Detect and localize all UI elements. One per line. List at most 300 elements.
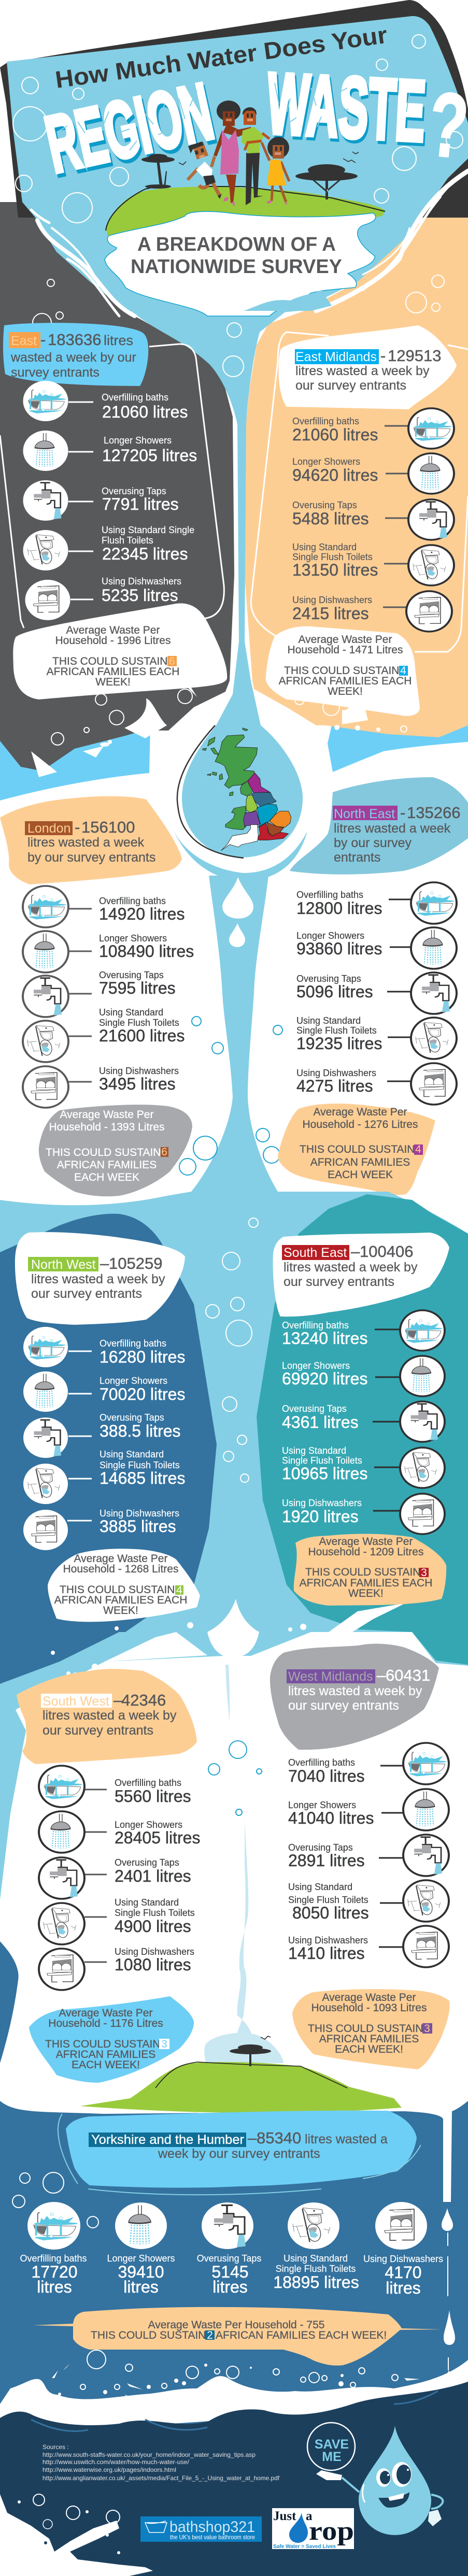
callout: South West total bbox=[17, 1669, 197, 1764]
callout: London average: Household - 1393 Litres bbox=[49, 1121, 164, 1133]
section: Yorkshire blue background bbox=[0, 2101, 468, 2425]
item: overusing taps: 5145 bbox=[211, 2263, 249, 2281]
cloud behind tree bbox=[204, 2033, 283, 2063]
item: longer showers: Longer Showers bbox=[107, 2253, 175, 2264]
callout: London average: Average Waste Per bbox=[60, 1109, 153, 1121]
item: single flush toilets: 13150 litres bbox=[292, 561, 378, 579]
item: overusing taps: Overusing Taps bbox=[197, 2253, 261, 2264]
item: dishwashers: Using Dishwashers bbox=[292, 595, 372, 605]
item: longer showers bbox=[288, 1789, 449, 1830]
subtitle: a breakdown of a nationwide survey: NATIONWIDE SURVEY bbox=[131, 256, 342, 278]
callout: London average bbox=[39, 1105, 192, 1196]
callout: Yorkshire total bbox=[66, 2111, 417, 2188]
callout: North East average: 4 bbox=[415, 1143, 421, 1155]
footer ripple lines bbox=[31, 2391, 438, 2431]
item: single flush toilets bbox=[296, 1015, 457, 1059]
item: longer showers: 69920 litres bbox=[282, 1369, 367, 1388]
callout: East Midlands average: 4 bbox=[400, 665, 406, 677]
item: single flush toilets: Flush Toilets bbox=[102, 535, 153, 546]
callout: East total: - bbox=[40, 331, 46, 349]
callout: West Midlands total: – bbox=[377, 1666, 386, 1684]
item: dishwashers: Using Dishwashers bbox=[282, 1498, 362, 1508]
item: overusing taps: Overusing Taps bbox=[282, 1404, 347, 1414]
region: Cumbria bbox=[240, 781, 253, 796]
item: overfilling baths: Overfilling baths bbox=[296, 890, 363, 900]
item: overusing taps: 388.5 litres bbox=[100, 1422, 181, 1440]
item: longer showers: Longer Showers bbox=[296, 931, 364, 941]
item: dishwashers: 5235 litres bbox=[102, 586, 178, 605]
callout: Yorkshire average: 2 bbox=[207, 2329, 213, 2341]
region: Yorkshire bbox=[251, 792, 276, 807]
item: overusing taps bbox=[282, 1401, 445, 1442]
item: longer showers bbox=[292, 453, 454, 494]
illustration: family bbox=[188, 101, 289, 207]
callout: North East average: EACH WEEK bbox=[328, 1169, 393, 1181]
item: single flush toilets: Using Standard bbox=[100, 1449, 164, 1459]
item: overfilling baths bbox=[23, 1327, 185, 1367]
item: overusing taps: 5096 litres bbox=[296, 982, 373, 1001]
item: overfilling baths: Overfilling baths bbox=[102, 392, 168, 403]
item: dishwashers: 1920 litres bbox=[282, 1507, 359, 1526]
subtitle: a breakdown of a nationwide survey: A BREAKDOWN OF A bbox=[137, 234, 336, 255]
item: dishwashers: Using Dishwashers bbox=[288, 1935, 368, 1945]
callout: North East total: entrants bbox=[334, 850, 380, 865]
item: longer showers: 127205 litres bbox=[102, 446, 197, 465]
item: single flush toilets: Single Flush Toilets bbox=[100, 1460, 180, 1470]
callout: West Midlands average: AFRICAN FAMILIES bbox=[319, 2033, 419, 2045]
callout: East average: Household - 1996 Litres bbox=[55, 635, 171, 647]
item: longer showers: 93860 litres bbox=[296, 939, 382, 958]
callout: Yorkshire total: Yorkshire and the Humber bbox=[91, 2133, 244, 2147]
item: overusing taps: Overusing Taps bbox=[102, 486, 166, 496]
callout: South East average: Household - 1209 Litres bbox=[308, 1546, 423, 1558]
item: longer showers: litres bbox=[123, 2278, 159, 2296]
item: overusing taps bbox=[23, 1412, 181, 1458]
item: single flush toilets: Single Flush Toilets bbox=[296, 1025, 377, 1036]
item: longer showers: 94620 litres bbox=[292, 466, 378, 484]
sources: http://www.south-staffs-water.co.uk/your_home/indoor_water_saving_tips.asp bbox=[42, 2451, 256, 2458]
splash: bottom left bbox=[0, 2494, 153, 2576]
item: single flush toilets: Using Standard bbox=[292, 542, 357, 552]
item: dishwashers bbox=[23, 1066, 179, 1108]
bubbles: blue outline bbox=[208, 1741, 262, 1815]
callout: North East total: - bbox=[400, 804, 405, 822]
item: dishwashers bbox=[288, 1926, 449, 1967]
item: longer showers bbox=[282, 1356, 445, 1396]
item: overfilling baths: Overfilling baths bbox=[20, 2253, 87, 2264]
water below the cloud bbox=[244, 290, 332, 311]
item: longer showers: Longer Showers bbox=[99, 933, 167, 943]
item: overusing taps: litres bbox=[212, 2278, 248, 2296]
region: East bbox=[270, 811, 291, 827]
logo: bathshop321: the UK's best value bathroom store bbox=[170, 2534, 255, 2541]
item: dishwashers bbox=[39, 1947, 194, 1990]
item: overfilling baths: litres bbox=[37, 2278, 72, 2296]
callout: North West total: – bbox=[100, 1254, 109, 1272]
callout: London total: by our survey entrants bbox=[27, 850, 155, 865]
title: REGION bbox=[38, 66, 222, 193]
callout: South East total: litres wasted a week by bbox=[283, 1260, 418, 1275]
region: North East bbox=[248, 773, 270, 793]
subtitle cloud bbox=[105, 211, 376, 316]
item: single flush toilets: Using Standard bbox=[282, 1446, 346, 1456]
item: overfilling baths: Overfilling baths bbox=[115, 1778, 181, 1788]
section: navy footer bbox=[0, 2382, 468, 2576]
splash: under East bbox=[31, 674, 197, 777]
callout: North West average: THIS COULD SUSTAIN bbox=[60, 1584, 175, 1596]
splash above lower white area bbox=[51, 1599, 417, 1680]
mascot: SAVE ME bubble: SAVE bbox=[315, 2437, 349, 2452]
item: single flush toilets: 4900 litres bbox=[115, 1917, 191, 1936]
callout: South West average: Average Waste Per bbox=[59, 2007, 152, 2019]
callout: East average: THIS COULD SUSTAIN bbox=[52, 655, 167, 667]
region: North West bbox=[246, 795, 258, 812]
callout: Yorkshire total: 85340 bbox=[257, 2129, 301, 2147]
callout: Yorkshire average: THIS COULD SUSTAIN bbox=[91, 2329, 206, 2341]
item: overfilling baths: Overfilling baths bbox=[100, 1338, 166, 1349]
foam: white wave bbox=[0, 2360, 468, 2435]
callout: South West total: 42346 bbox=[121, 1691, 166, 1709]
callout: South East total: our survey entrants bbox=[283, 1275, 394, 1289]
item: dishwashers: 3885 litres bbox=[100, 1517, 176, 1536]
callout: South West total: our survey entrants bbox=[42, 1723, 153, 1738]
item: overfilling baths bbox=[282, 1310, 445, 1351]
item: longer showers bbox=[23, 1371, 185, 1412]
callout: South West average: AFRICAN FAMILIES bbox=[56, 2049, 155, 2060]
item: dishwashers bbox=[296, 1063, 457, 1105]
callout: South East total: South East bbox=[283, 1246, 347, 1260]
callout: South East average: 3 bbox=[421, 1567, 427, 1579]
panel: South East bbox=[273, 1233, 449, 1606]
item: overfilling baths bbox=[23, 886, 185, 927]
item: single flush toilets: 8050 litres bbox=[292, 1904, 369, 1922]
item: overusing taps: 2891 litres bbox=[288, 1851, 365, 1870]
item: longer showers: Longer Showers bbox=[115, 1820, 182, 1830]
callout: North West total: our survey entrants bbox=[31, 1286, 142, 1301]
item: overfilling baths bbox=[20, 2202, 87, 2296]
item: single flush toilets: 21600 litres bbox=[99, 1026, 185, 1045]
item: overusing taps bbox=[23, 970, 176, 1017]
region: South East bbox=[258, 823, 289, 840]
item: longer showers: 28405 litres bbox=[115, 1828, 200, 1847]
item: single flush toilets: Using Standard bbox=[99, 1007, 163, 1018]
figure: woman bbox=[214, 101, 252, 207]
callout: South East average bbox=[294, 1534, 446, 1606]
callout: South West average: EACH WEEK! bbox=[72, 2059, 140, 2071]
callout: East Midlands total: our survey entrants bbox=[295, 378, 406, 393]
splash bubbles and dots bbox=[18, 2494, 120, 2554]
panel: East bbox=[3, 323, 227, 699]
callout: North East total: by our survey bbox=[334, 836, 412, 850]
illustration: acacia tree left bbox=[141, 154, 175, 189]
callout: West Midlands total bbox=[270, 1643, 439, 1750]
item: single flush toilets bbox=[39, 1897, 195, 1944]
callout: South West total: litres wasted a week by bbox=[42, 1708, 177, 1723]
sources: http://www.waterwise.org.uk/pages/indoors.html bbox=[42, 2466, 176, 2473]
callout: East total: wasted a week by our bbox=[10, 350, 136, 365]
region: London bbox=[267, 822, 284, 836]
panel: North West bbox=[15, 1232, 200, 1622]
item: dishwashers: Using Dishwashers bbox=[115, 1947, 194, 1957]
item: overfilling baths: Overfilling baths bbox=[99, 896, 166, 906]
callout: East Midlands average: AFRICAN FAMILIES EACH bbox=[279, 675, 412, 687]
sources: Sources : bbox=[42, 2443, 69, 2451]
water stream top bbox=[131, 311, 287, 725]
callout: South West average bbox=[29, 1996, 194, 2083]
water drops on right side bbox=[442, 2208, 455, 2386]
panel: North East bbox=[278, 777, 468, 1195]
callout: North West average: AFRICAN FAMILIES EACH bbox=[54, 1594, 187, 1606]
item: overusing taps bbox=[197, 2202, 261, 2296]
figure: boy bbox=[188, 141, 222, 199]
callout: East average: 6 bbox=[169, 655, 175, 667]
item: dishwashers bbox=[23, 1508, 179, 1550]
illustration: hill outline bbox=[106, 185, 385, 231]
title: REGION: REGION bbox=[38, 66, 220, 189]
callout: Yorkshire average: Average Waste Per Household - 755 bbox=[148, 2319, 324, 2331]
callout: Yorkshire average: AFRICAN FAMILIES EACH WEEK! bbox=[216, 2329, 387, 2341]
item: longer showers bbox=[107, 2202, 175, 2296]
callout: North West average: 4 bbox=[176, 1584, 182, 1596]
item: overfilling baths bbox=[39, 1766, 191, 1807]
illustration: birds bbox=[179, 152, 359, 165]
callout: West Midlands average: Household - 1093 Litres bbox=[311, 2002, 427, 2014]
callout: London total: litres wasted a week bbox=[27, 835, 145, 850]
callout: East Midlands average: WEEK! bbox=[328, 685, 363, 697]
bird bbox=[261, 2036, 271, 2039]
item: dishwashers bbox=[292, 591, 452, 632]
hill outline bbox=[155, 2062, 347, 2088]
item: overusing taps bbox=[292, 499, 454, 540]
item: overusing taps bbox=[39, 1857, 191, 1899]
drop lower crescents bbox=[173, 829, 307, 881]
mascot: SAVE ME bubble: ME bbox=[322, 2450, 342, 2464]
item: longer showers bbox=[23, 931, 194, 972]
callout: East average: AFRICAN FAMILIES EACH bbox=[47, 666, 179, 678]
header: foam swirls bbox=[31, 171, 468, 316]
item: overfilling baths: 16280 litres bbox=[100, 1348, 185, 1366]
item: single flush toilets: Using Standard Single bbox=[102, 525, 194, 535]
item: overusing taps: Overusing Taps bbox=[292, 500, 357, 510]
item: longer showers bbox=[296, 927, 457, 969]
item: overfilling baths bbox=[288, 1743, 449, 1785]
callout: North East average: THIS COULD SUSTAIN bbox=[300, 1143, 415, 1155]
drop: small white drop bbox=[229, 923, 245, 947]
panel: South West bbox=[17, 1669, 200, 2083]
splash: under East Midlands bbox=[334, 699, 380, 732]
callout: North West average bbox=[48, 1549, 200, 1622]
item: single flush toilets: 10965 litres bbox=[282, 1464, 367, 1483]
item: longer showers: 39410 bbox=[118, 2263, 164, 2281]
item: overfilling baths: Overfilling baths bbox=[292, 416, 359, 426]
item: single flush toilets: Single Flush Toilets bbox=[115, 1908, 195, 1918]
panel background: light blue band left bbox=[0, 725, 150, 800]
callout: South East average: WEEK! bbox=[348, 1587, 384, 1599]
item: overusing taps: 7595 litres bbox=[99, 979, 176, 997]
item: single flush toilets: Using Standard bbox=[288, 1882, 352, 1892]
callout: North East total: 135266 bbox=[407, 804, 460, 822]
item: overusing taps: 2401 litres bbox=[115, 1867, 191, 1885]
region: islands bbox=[203, 728, 248, 796]
region: West Midlands bbox=[244, 811, 260, 826]
hill: lower tree hill bbox=[80, 2062, 402, 2113]
item: overusing taps: Overusing Taps bbox=[288, 1842, 353, 1853]
callout: East Midlands average bbox=[266, 626, 420, 716]
item: overfilling baths bbox=[292, 408, 454, 449]
item: single flush toilets: 14685 litres bbox=[100, 1469, 185, 1487]
item: overfilling baths: 21060 litres bbox=[292, 425, 378, 444]
callout: Yorkshire total: litres wasted a bbox=[305, 2132, 388, 2146]
item: single flush toilets: Single Flush Toilets bbox=[288, 1895, 368, 1905]
item: overusing taps bbox=[296, 972, 457, 1014]
item: overusing taps: Overusing Taps bbox=[99, 970, 164, 980]
callout: London average: EACH WEEK bbox=[74, 1171, 139, 1183]
callout: North East total bbox=[290, 777, 468, 875]
item: overfilling baths bbox=[296, 882, 457, 924]
callout: South West average: 3 bbox=[161, 2038, 167, 2050]
callout: East total: East bbox=[11, 334, 37, 348]
callout: North West average: WEEK! bbox=[103, 1605, 138, 1616]
decor: ripple lines around callout bbox=[58, 2114, 421, 2195]
logo: bathshop321: bathshop321 bbox=[169, 2518, 255, 2536]
item: single flush toilets: 18895 litres bbox=[273, 2273, 359, 2292]
section: dark blue left sliver bbox=[0, 1941, 19, 2063]
region: Scotland bbox=[215, 735, 258, 789]
callout: West Midlands average: 3 bbox=[424, 2023, 430, 2035]
section: teal South East backdrop bbox=[257, 1194, 468, 1665]
callout: North West average: Average Waste Per bbox=[74, 1553, 167, 1565]
item: overusing taps: 4361 litres bbox=[282, 1413, 359, 1432]
callout: East Midlands total bbox=[278, 325, 457, 409]
item: longer showers: Longer Showers bbox=[288, 1800, 356, 1810]
item: single flush toilets: Single Flush Toilets bbox=[282, 1455, 362, 1466]
callout: South East average: Average Waste Per bbox=[319, 1536, 413, 1548]
item: single flush toilets: Single Flush Toilets bbox=[276, 2264, 356, 2274]
sources: http://www.uswitch.com/water/how-much-water-use/ bbox=[42, 2458, 190, 2466]
logo: bathshop321 bbox=[140, 2516, 262, 2542]
callout: East Midlands average: THIS COULD SUSTAIN bbox=[284, 665, 399, 677]
item: dishwashers: 2415 litres bbox=[292, 604, 369, 623]
callout: West Midlands total: West Midlands bbox=[288, 1669, 373, 1684]
callout: South East average: AFRICAN FAMILIES EACH bbox=[300, 1577, 432, 1589]
callout: London total: 156100 bbox=[81, 818, 135, 836]
callout: North West total: 105259 bbox=[109, 1254, 162, 1272]
illustration: green hill bbox=[106, 187, 385, 239]
item: overfilling baths: 12800 litres bbox=[296, 899, 382, 918]
item: overusing taps: Overusing Taps bbox=[296, 974, 361, 984]
item: single flush toilets bbox=[282, 1446, 445, 1488]
callout: East total: 183636 bbox=[48, 331, 101, 349]
bubbles: between North West and South East bbox=[206, 1218, 258, 1482]
item: overusing taps: Overusing Taps bbox=[115, 1857, 179, 1868]
callout: North East total: North East bbox=[334, 807, 395, 821]
item: overusing taps bbox=[23, 480, 179, 521]
callout: London total bbox=[0, 796, 182, 884]
panel: Yorkshire and the Humber bbox=[20, 2111, 443, 2366]
callout: East total: litres bbox=[104, 333, 133, 348]
callout: South West total: – bbox=[114, 1691, 123, 1709]
item: single flush toilets bbox=[23, 1449, 185, 1504]
callout: West Midlands average: EACH WEEK! bbox=[335, 2043, 403, 2055]
callout: West Midlands average bbox=[292, 1989, 450, 2069]
item: dishwashers bbox=[363, 2202, 443, 2297]
item: overfilling baths: 7040 litres bbox=[288, 1767, 365, 1785]
callout: North West total: North West bbox=[31, 1257, 96, 1272]
item: longer showers: Longer Showers bbox=[282, 1361, 350, 1371]
figure: girl bbox=[262, 137, 289, 205]
callout: North East average bbox=[278, 1104, 435, 1195]
sources: http://www.anglianwater.co.uk/_assets/media/Fact_File_5_-_Using_water_at_home.pdf bbox=[42, 2474, 280, 2482]
callout: East Midlands total: East Midlands bbox=[295, 350, 377, 364]
item: overfilling baths: 13240 litres bbox=[282, 1329, 367, 1348]
item: overfilling baths: 17720 bbox=[32, 2263, 77, 2281]
item: single flush toilets bbox=[23, 1007, 185, 1062]
logo: Just a Drop bbox=[272, 2508, 354, 2550]
bubbles: Yorkshire bbox=[12, 2172, 398, 2389]
item: overusing taps: 7791 litres bbox=[102, 495, 179, 513]
central water drop bbox=[182, 674, 303, 857]
outlined frame: East Midlands bbox=[251, 332, 468, 652]
item: single flush toilets bbox=[292, 542, 454, 585]
subtitle: a breakdown of a nationwide survey bbox=[131, 234, 342, 278]
item: dishwashers: litres bbox=[386, 2279, 421, 2297]
callout: West Midlands total: 60431 bbox=[386, 1666, 430, 1684]
callout: London total: - bbox=[75, 818, 80, 836]
panel background: dark grey East section bbox=[0, 202, 234, 771]
item: single flush toilets: Single Flush Toilets bbox=[292, 552, 373, 562]
logo: Just a Drop: rop bbox=[309, 2516, 354, 2546]
item: overusing taps: 5488 litres bbox=[292, 509, 369, 528]
item: overfilling baths: Overfilling baths bbox=[282, 1320, 349, 1330]
callout: South East total: – bbox=[351, 1242, 360, 1261]
callout: South West average: THIS COULD SUSTAIN bbox=[45, 2038, 160, 2050]
thin stream bbox=[225, 1665, 251, 2036]
drop outline dark arc bbox=[177, 725, 244, 858]
callout: East average: WEEK! bbox=[95, 676, 131, 688]
header: blue water goblet bbox=[7, 16, 468, 316]
item: single flush toilets: Using Standard bbox=[296, 1015, 361, 1026]
callout: North West average: Household - 1268 Litres bbox=[63, 1563, 178, 1575]
callout: West Midlands total: our survey entrants bbox=[288, 1698, 399, 1713]
callout: North East average: AFRICAN FAMILIES bbox=[310, 1156, 410, 1168]
item: single flush toilets bbox=[273, 2202, 359, 2292]
callout: London average: 6 bbox=[161, 1146, 167, 1158]
section: dark blue North West backdrop bbox=[0, 1214, 217, 1684]
item: overfilling baths: Overfilling baths bbox=[288, 1757, 355, 1768]
item: longer showers: 108490 litres bbox=[99, 942, 194, 961]
logo: Just a Drop: a bbox=[306, 2509, 313, 2523]
item: dishwashers: Using Dishwashers bbox=[363, 2254, 443, 2264]
callout: West Midlands total: litres wasted a week by bbox=[288, 1684, 422, 1698]
logo: Just a Drop: Just bbox=[273, 2509, 296, 2523]
callout: West Midlands average: Average Waste Per bbox=[322, 1992, 416, 2003]
callout: East Midlands average: Household - 1471 Litres bbox=[288, 644, 403, 656]
panel: London bbox=[0, 796, 194, 1196]
water body behind lower sections bbox=[0, 1192, 468, 1900]
callout: Yorkshire total: week by our survey entrants bbox=[158, 2146, 320, 2161]
item: dishwashers: Using Dishwashers bbox=[296, 1068, 376, 1078]
item: dishwashers: 4275 litres bbox=[296, 1077, 373, 1095]
sources bbox=[42, 2443, 280, 2482]
callout: London average: AFRICAN FAMILIES bbox=[57, 1159, 157, 1171]
item: longer showers: 70020 litres bbox=[100, 1385, 185, 1404]
item: single flush toilets: 22345 litres bbox=[102, 545, 188, 563]
drop: large white drop bbox=[222, 877, 253, 919]
region: South West bbox=[221, 825, 258, 851]
panel background: light blue band right bbox=[328, 725, 468, 772]
callout: North West total bbox=[15, 1232, 185, 1325]
item: single flush toilets bbox=[288, 1880, 449, 1922]
